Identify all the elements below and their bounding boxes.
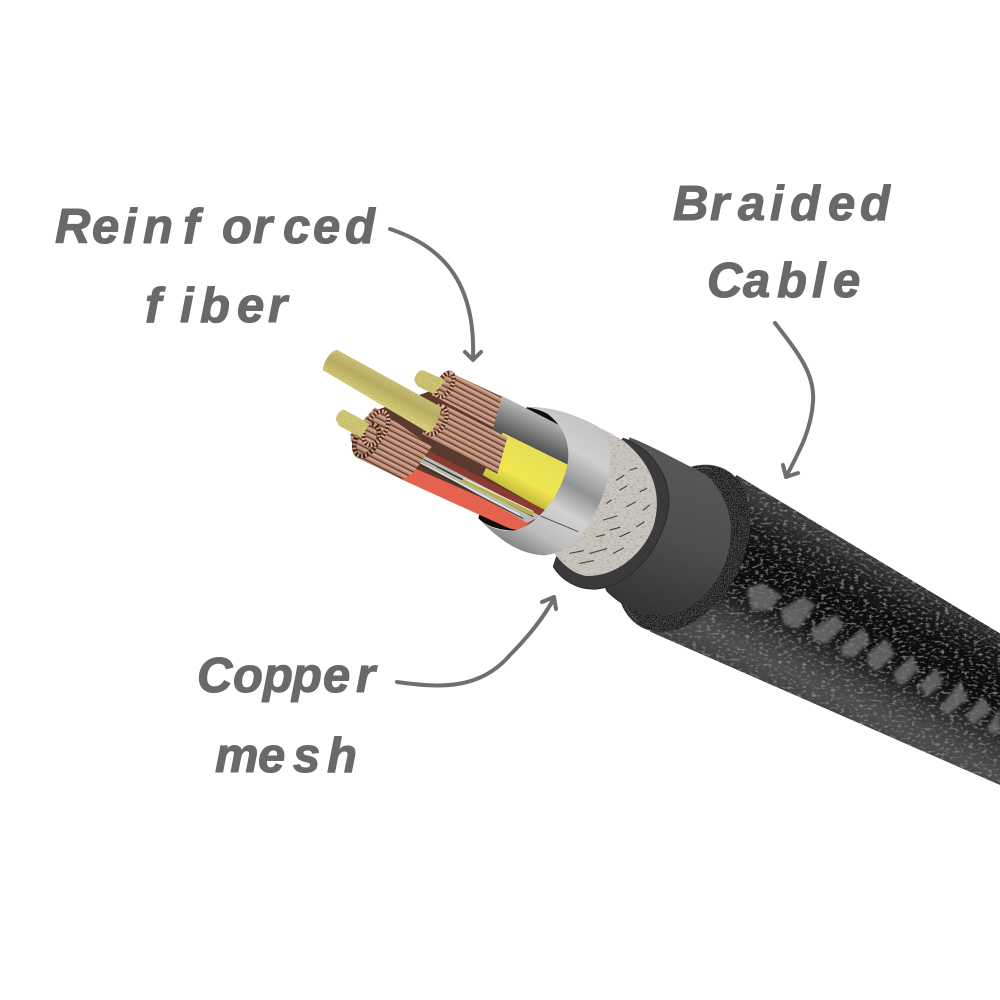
braid top strand lines xyxy=(760,502,1000,650)
small top fiber xyxy=(414,370,446,394)
label: Reinforced fiber xyxy=(55,200,376,333)
cable illustration xyxy=(323,350,1000,785)
label: Reinforced fiber: Reinforced xyxy=(55,200,376,254)
red wire xyxy=(399,468,533,530)
reinforced fibers xyxy=(323,350,446,437)
small left fiber xyxy=(336,410,370,437)
label: Copper mesh: mesh xyxy=(215,729,357,783)
jacket front ring xyxy=(553,438,669,589)
copper strand bundles xyxy=(349,370,507,479)
copper mesh xyxy=(553,422,657,576)
dark strand backing xyxy=(355,390,545,527)
dark red wire xyxy=(426,451,548,518)
sleeve dark interior xyxy=(478,407,573,531)
braid chevrons xyxy=(747,583,1000,733)
braided outer cable xyxy=(650,475,1000,785)
foam layer xyxy=(589,442,778,655)
large center fiber xyxy=(323,350,442,433)
mesh weave marks xyxy=(570,468,649,563)
silver core wires xyxy=(390,450,542,523)
label: Braided Cable xyxy=(673,177,891,308)
arrow: to braided cable xyxy=(775,323,813,477)
label: Reinforced fiber: fiber xyxy=(145,279,290,333)
lower left bundle xyxy=(350,407,432,479)
middle bundle xyxy=(422,406,507,474)
silver sleeve xyxy=(481,407,610,555)
label: Copper mesh: Copper xyxy=(197,649,378,703)
gray wire xyxy=(493,395,577,470)
yellow wire xyxy=(483,433,573,513)
label: Copper mesh xyxy=(197,649,378,783)
top bundle xyxy=(432,372,502,427)
label: Braided Cable: Braided xyxy=(673,177,891,231)
arrow: to reinforced fiber xyxy=(390,229,481,360)
strand end rings xyxy=(349,370,457,460)
label: Braided Cable: Cable xyxy=(707,254,860,308)
core wires xyxy=(323,350,610,555)
arrow: to copper mesh xyxy=(397,597,556,685)
inner black jacket xyxy=(573,437,731,615)
outer sections of cable xyxy=(553,422,1000,785)
